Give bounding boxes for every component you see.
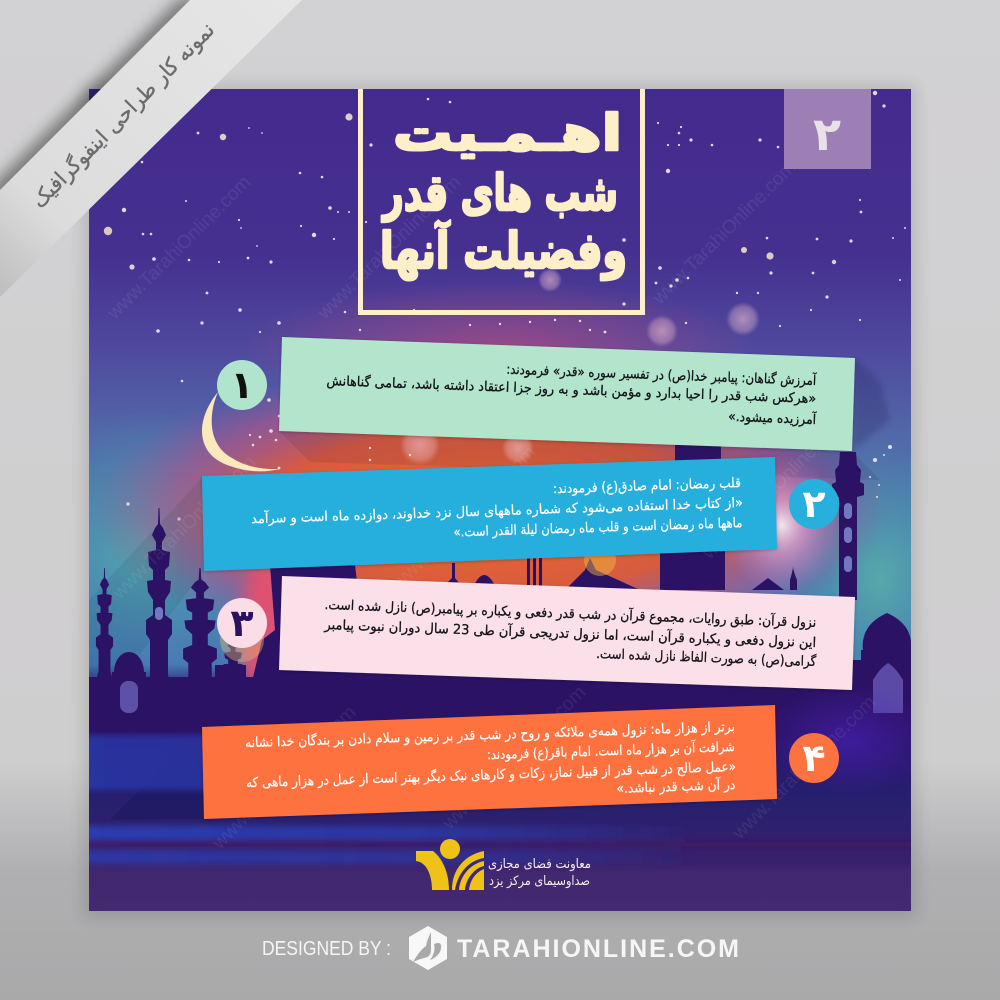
footer credit (262, 926, 739, 970)
icon: yellow emblem (416, 839, 484, 890)
page number box (784, 89, 871, 169)
panel 3 text: گرامی(ص) به صورت الفاظ نازل شده است. (596, 645, 817, 670)
panel 3 text: نزول قرآن: طبق روایات، مجموع قرآن در شب قدر دفعی و یکباره بر پیامبر(ص) نازل شده است. (324, 596, 816, 631)
ribbon text: نمونه کار طراحی اینفوگرافیک (27, 18, 219, 213)
badge 1: ۱ (230, 363, 254, 407)
panel 4 text (245, 718, 736, 797)
panel 4 text: برتر از هزار ماه: نزول همه‌ی ملائکه و روح در شب قدر بر زمین و سلام دادن بر بندگان خدا نشانه (245, 718, 735, 751)
panel 4 text: «عمل صالح در شب قدر از قبیل نماز، زکات و کارهای نیک دیگر بهتر است از عمل در هزار ماهی که (246, 758, 736, 791)
icon: hexagon logo (409, 926, 447, 970)
panel 2 text: ماهها ماه رمضان است و قلب ماه رمضان لیلة القدر است.» (453, 515, 743, 541)
violet glow (776, 693, 911, 786)
title: شب های قدر (381, 164, 618, 222)
bottom horizontal light stripes (89, 732, 911, 868)
poster card (89, 89, 911, 911)
panel 2: heart of Ramadan (202, 457, 839, 571)
designed by label: DESIGNED BY : (262, 938, 391, 960)
panel 3 text (323, 596, 817, 670)
title: اهـمـیت (393, 104, 622, 162)
watermark: www.TarahiOnline.com (728, 692, 880, 844)
badge 2: ۲ (802, 482, 826, 526)
website name: TARAHIONLINE.COM (457, 935, 739, 963)
panel 4: better than a thousand months (202, 705, 839, 819)
panel 4 text: شرافت آن بر هزار ماه است. امام باقر(ع) فرمودند: (487, 738, 735, 763)
watermark: www.TarahiOnline.com (313, 172, 465, 324)
badge 1 (217, 360, 267, 410)
page number box: ۲ (813, 107, 841, 161)
bokeh lights (213, 268, 760, 662)
panel 2 text (251, 475, 743, 541)
panel 1 text (326, 361, 818, 428)
title frame (360, 89, 642, 312)
panel 3 text: این نزول دفعی و یکباره قرآن است، اما نزول تدریجی قرآن طی 23 سال دوران نبوت پیامبر (323, 616, 816, 651)
organisation name (488, 857, 591, 889)
panel 3: revelation of the Quran (217, 576, 855, 690)
panel 4 text: در آن شب قدر نباشد.» (616, 776, 736, 797)
badge 3 (217, 598, 267, 648)
watermark: www.TarahiOnline.com (388, 442, 540, 594)
mosque silhouette (89, 445, 913, 800)
panel 1: forgiveness of sins (217, 337, 855, 451)
corner ribbon (0, 0, 302, 297)
icon: crescent moon (202, 392, 280, 471)
watermark (103, 157, 880, 854)
card shadow (84, 85, 916, 917)
badge 3: ۳ (230, 601, 254, 645)
watermark: www.TarahiOnline.com (648, 157, 800, 309)
panel 1 text: «هرکس شب قدر را احیا بدارد و مؤمن باشد و به روز جزا اعتقاد داشته باشد، تمامی گناهانش (326, 372, 816, 407)
stars (104, 91, 906, 521)
organisation name: صداوسیمای مرکز یزد (489, 874, 590, 889)
badge 2 (789, 479, 839, 529)
panel 2 text: «از کتاب خدا استفاده می‌شود که شماره ماههای سال نزد خداوند، دوازده ماه است و سرآمد (251, 494, 743, 527)
ribbon shadow (0, 0, 207, 213)
sky gradient (89, 89, 911, 911)
light facets and panel shadows (89, 358, 890, 820)
watermark: www.TarahiOnline.com (208, 702, 360, 854)
badge 4: ۴ (802, 736, 826, 780)
footer organisation logo (416, 839, 591, 890)
watermark: www.TarahiOnline.com (103, 172, 255, 324)
panel 2 text: قلب رمضان: امام صادق(ع) فرمودند: (553, 475, 741, 497)
panel 1 text: آمرزش گناهان: پیامبر خدا(ص) در تفسیر سوره «قدر» فرمودند: (506, 361, 818, 389)
badge 4 (789, 733, 839, 783)
organisation name: معاونت فضای مجازی (488, 857, 591, 872)
watermark: www.TarahiOnline.com (438, 682, 590, 834)
mosque windows (120, 503, 903, 713)
title (380, 104, 627, 281)
watermark: www.TarahiOnline.com (108, 452, 260, 604)
watermark: www.TarahiOnline.com (698, 412, 850, 564)
panel 1 text: آمرزیده میشود.» (728, 408, 818, 428)
title: وفضیلت آنها (380, 220, 627, 281)
